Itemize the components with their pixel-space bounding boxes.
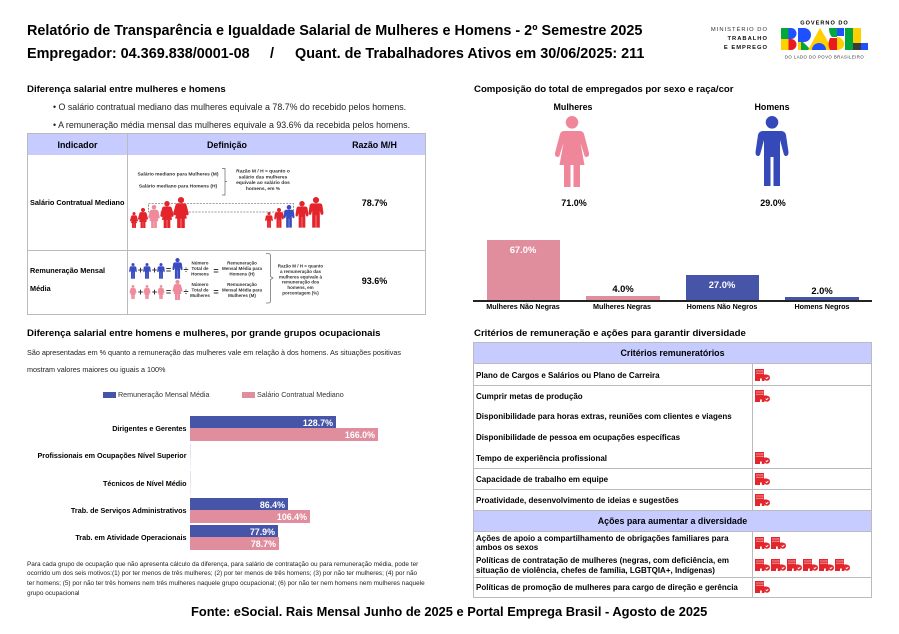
logo: Governo do Brasil: GOVERNO DO: [800, 20, 849, 26]
pictograma: homens: Homens: [754, 102, 790, 112]
bar chart: raça/cor: 67.0%: [510, 244, 536, 255]
text block: bullet points: [53, 102, 410, 130]
value: 78.7%: 78.7%: [362, 198, 387, 208]
diagram: remuneração média mensal: +: [152, 265, 157, 275]
diagram: remuneração média mensal: Total de: [192, 288, 209, 292]
pictograma: mulheres: 71.0%: [561, 198, 587, 208]
header: ações: Ações para aumentar a diversidade: [598, 516, 747, 526]
bar chart: raça/cor: Homens Não Negros: [687, 302, 757, 311]
diagram: salário contratual mediano: Salário mediano para Mulheres (M): [138, 172, 219, 178]
diagram: salário contratual mediano: salário das mulheres: [239, 174, 288, 180]
diagram: remuneração média mensal: Mensal Média para: [222, 288, 263, 292]
row: salário contratual: Salário Contratual Mediano: [30, 198, 124, 207]
pictograma: mulheres: Mulheres: [554, 102, 592, 112]
bar chart: grupos ocupacionais: [38, 416, 378, 550]
row: remuneração mensal: Média: [30, 284, 51, 293]
diagram: remuneração média mensal: Homens: [191, 272, 209, 276]
bar chart: raça/cor: Mulheres Negras: [593, 302, 651, 311]
table header: Indicador: [58, 140, 97, 150]
criteria labels: Políticas de promoção de mulheres para cargo de direção e gerência: [476, 583, 738, 592]
table header: Definição: [207, 140, 247, 150]
legend: Salário Contratual Mediano: [257, 391, 344, 399]
diagram: remuneração média mensal: Razão M / H = quanto: [278, 264, 323, 268]
bar chart: raça/cor: [473, 240, 872, 311]
title: /: [270, 46, 274, 62]
legend: Remuneração Mensal Média: [118, 391, 210, 399]
diagram: remuneração média mensal: =: [166, 287, 171, 297]
diagram: remuneração média mensal: Homens (H): [229, 272, 255, 276]
value: 93.6%: 93.6%: [362, 276, 387, 286]
bar chart: raça/cor: Mulheres Não Negras: [486, 302, 560, 311]
text block: bullet points: • A remuneração média mensal das mulheres equivale a 93.6% da recebida pelos homens.: [53, 120, 410, 130]
criteria labels: Cumprir metas de produção: [476, 392, 583, 401]
header: critérios remuneratórios: [474, 343, 871, 363]
bar chart: grupos ocupacionais: Trab. de Serviços Administrativos: [71, 506, 186, 514]
diagram: remuneração média mensal: Número: [191, 260, 209, 266]
bar chart: grupos ocupacionais: 106.4%: [277, 512, 307, 522]
bar chart: raça/cor: 27.0%: [709, 279, 735, 290]
text block: nota do gráfico: [27, 348, 401, 374]
diagram: remuneração média mensal: =: [213, 287, 219, 297]
diagram: salário contratual mediano: homens, em %: [246, 186, 281, 192]
bar chart: grupos ocupacionais: 166.0%: [345, 430, 375, 440]
bar chart: grupos ocupacionais: Técnicos de Nível Médio: [103, 478, 186, 488]
panel: tabela de critérios: [473, 342, 872, 598]
diagram: remuneração média mensal: Remuneração: [227, 282, 257, 287]
row: remuneração mensal: Remuneração Mensal: [30, 266, 105, 275]
footnote: ocorrido um dos seis motivos:(1) por ter menos de três mulheres; (2) por ter menos de três homens; (3) por não ter mulheres; (4) por não: [27, 570, 417, 577]
criteria labels: Ações de apoio a compartilhamento de obrigações familiares para: [476, 534, 729, 543]
footnote: grupo ocupacional: [27, 590, 80, 597]
text block: bullet points: • O salário contratual mediano das mulheres equivale a 78.7% do recebido pelos homens.: [53, 102, 406, 112]
heading: diferença salarial: Diferença salarial entre mulheres e homens: [27, 84, 226, 95]
diagram: remuneração média mensal: [129, 253, 323, 304]
title: Relatório de Transparência e Igualdade Salarial de Mulheres e Homens - 2º Semestre 2025: [27, 23, 642, 39]
criteria labels: Plano de Cargos e Salários ou Plano de Carreira: [476, 371, 660, 380]
row: remuneração mensal: [30, 266, 105, 293]
diagram: remuneração média mensal: ÷: [184, 265, 189, 275]
logo: Ministério do Trabalho e Emprego: E EMPREGO: [724, 45, 768, 51]
criteria labels: situação de violência, chefes de família, LGBTQIA+, Indígenas): [476, 566, 715, 575]
diagram: remuneração média mensal: =: [213, 266, 219, 276]
bar chart: grupos ocupacionais: 128.7%: [303, 418, 333, 428]
diagram: remuneração média mensal: a remuneração das: [280, 269, 322, 274]
diagram: remuneração média mensal: ÷: [184, 287, 189, 297]
diagram: remuneração média mensal: remuneração dos: [282, 280, 320, 284]
pictograma: homens: 29.0%: [760, 198, 786, 208]
footnote: [27, 560, 425, 597]
title: [27, 23, 644, 62]
bar chart: raça/cor: 2.0%: [811, 285, 833, 296]
header: critérios remuneratórios: Critérios remuneratórios: [620, 348, 725, 358]
diagram: remuneração média mensal: =: [166, 265, 171, 275]
diagram: remuneração média mensal: Remuneração: [227, 260, 257, 266]
logo: Governo do Brasil: DO LADO DO POVO BRASILEIRO: [785, 54, 864, 60]
diagram: salário contratual mediano: Razão M / H = quanto o: [236, 168, 290, 174]
bar chart: grupos ocupacionais: Profissionais em Ocupações Nível Superior: [38, 450, 186, 460]
diagram: remuneração média mensal: Mulheres (M): [228, 293, 256, 298]
diagram: remuneração média mensal: Número: [191, 282, 209, 287]
diagram: remuneração média mensal: homens, em: [287, 285, 314, 290]
bar chart: grupos ocupacionais: Trab. em Atividade Operacionais: [75, 532, 186, 542]
diagram: remuneração média mensal: Mulheres: [190, 293, 210, 298]
bar chart: grupos ocupacionais: 77.9%: [250, 527, 275, 537]
heading: grupos ocupacionais: Diferença salarial entre homens e mulheres, por grande grupos ocupacionais: [27, 328, 381, 339]
bar chart: raça/cor: Homens Negros: [794, 302, 850, 311]
diagram: remuneração média mensal: +: [138, 265, 143, 275]
header: ações: [474, 510, 871, 531]
diagram: remuneração média mensal: Mensal Média para: [222, 266, 263, 271]
panel: tabela indicador: [27, 133, 426, 315]
criteria labels: ambos os sexos: [476, 543, 538, 552]
logo: Ministério do Trabalho e Emprego: TRABALHO: [727, 36, 768, 42]
title: Empregador: 04.369.838/0001-08: [27, 46, 250, 62]
bar chart: raça/cor: 4.0%: [612, 283, 634, 294]
diagram: salário contratual mediano: equivale ao salário dos: [236, 180, 290, 186]
criteria labels: Proatividade, desenvolvimento de ideias e sugestões: [476, 496, 679, 505]
criteria labels: [476, 371, 738, 592]
footer: fonte: Fonte: eSocial. Rais Mensal Junho de 2025 e Portal Emprega Brasil - Agosto de 2025: [191, 604, 707, 619]
logo: Ministério do Trabalho e Emprego: MINISTÉRIO DO: [711, 27, 768, 33]
text block: nota do gráfico: mostram valores maiores ou iguais a 100%: [27, 365, 165, 374]
diagram: salário contratual mediano: [130, 168, 324, 228]
legend: [103, 391, 344, 399]
logo: Governo do Brasil: [781, 20, 868, 60]
criteria labels: Capacidade de trabalho em equipe: [476, 475, 608, 484]
diagram: remuneração média mensal: porcentagem (%): [282, 290, 319, 296]
diagram: remuneração média mensal: +: [138, 287, 143, 297]
diagram: remuneração média mensal: +: [152, 287, 157, 297]
text block: nota do gráfico: São apresentadas em % quanto a remuneração das mulheres vale em relação à dos homens. As situações positivas: [27, 348, 401, 357]
bar chart: grupos ocupacionais: 86.4%: [260, 500, 285, 510]
logo: Ministério do Trabalho e Emprego: [711, 26, 768, 51]
diagram: salário contratual mediano: Salário mediano para Homens (H): [139, 184, 218, 190]
criteria labels: Disponibilidade de pessoa em ocupações específicas: [476, 433, 680, 442]
diagram: remuneração média mensal: mulheres equivale à: [279, 274, 323, 280]
pictograma: homens: [754, 102, 790, 208]
pictograma: mulheres: [554, 102, 592, 208]
bar chart: grupos ocupacionais: Dirigentes e Gerentes: [112, 424, 186, 433]
icons: empresas: [755, 369, 850, 593]
bar chart: grupos ocupacionais: 78.7%: [251, 539, 276, 549]
table header: [28, 134, 425, 155]
criteria labels: Políticas de contratação de mulheres (negras, com deficiência, em: [476, 556, 729, 565]
diagram: remuneração média mensal: Total de: [192, 266, 209, 271]
title: Quant. de Trabalhadores Ativos em 30/06/2025: 211: [295, 46, 644, 62]
heading: composição: Composição do total de empregados por sexo e raça/cor: [474, 84, 734, 95]
footnote: Para cada grupo de ocupação que não apresenta cálculo da diferença, para salário de contratação ou para remuneração média, pode ter: [27, 560, 418, 568]
criteria labels: Disponibilidade para horas extras, reuniões com clientes e viagens: [476, 412, 732, 421]
footnote: ter homens; (5) por não ter três homens nem três mulheres naquele grupo ocupacional; (6) por não ter nem homens nem mulheres naquele: [27, 580, 425, 587]
table header: Razão M/H: [352, 140, 397, 150]
criteria labels: Tempo de experiência profissional: [476, 454, 607, 463]
heading: critérios: Critérios de remuneração e ações para garantir diversidade: [474, 328, 746, 339]
